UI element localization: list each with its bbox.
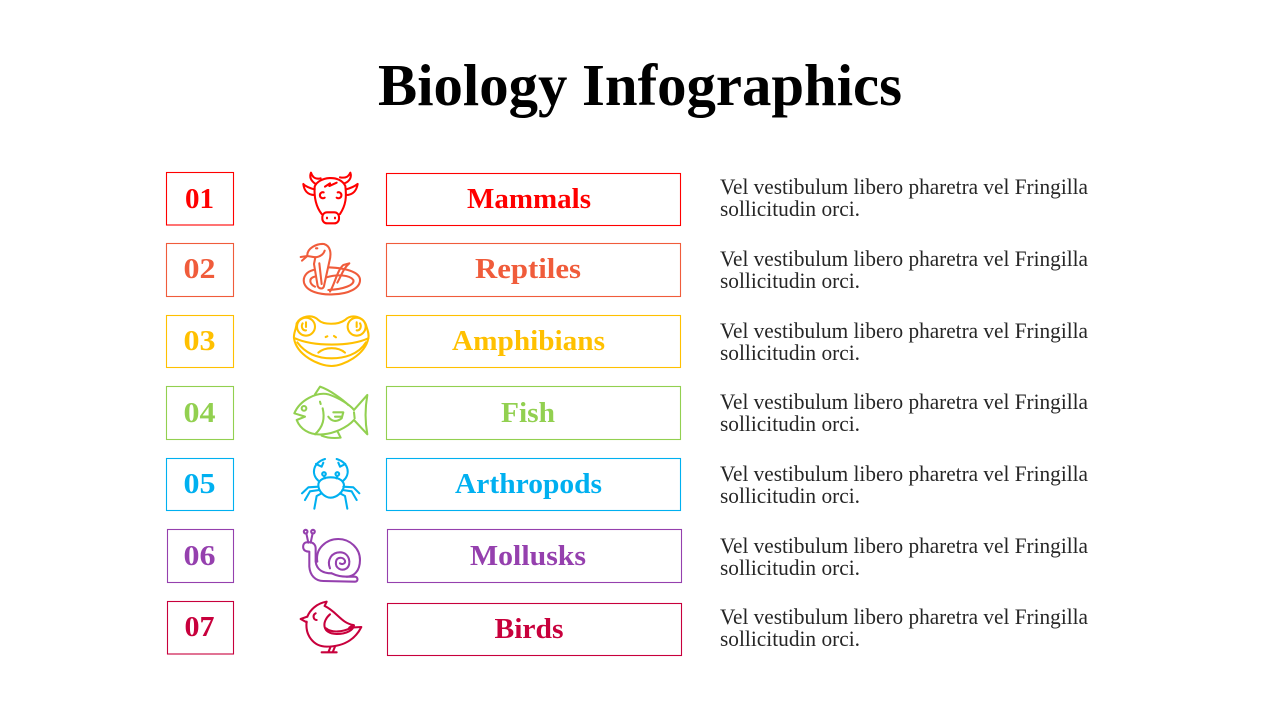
- row 2: reptiles: [166, 244, 1088, 296]
- description 7: Vel vestibulum libero pharetra vel Fringilla: [720, 604, 1088, 629]
- number box 05: 05: [184, 469, 216, 500]
- number box 06: [168, 530, 234, 582]
- number box 01: 01: [185, 184, 214, 215]
- number box 03: [166, 316, 234, 368]
- icon: frog: [294, 316, 369, 366]
- name box: Fish: Fish: [501, 398, 555, 429]
- description 7: sollicitudin orci.: [720, 626, 860, 651]
- name box: Reptiles: Reptiles: [475, 254, 581, 285]
- name box: Mollusks: [388, 530, 682, 582]
- row 7: birds: [168, 602, 1088, 656]
- number box 03: 03: [184, 326, 216, 357]
- number box 05: [166, 458, 234, 510]
- number box 07: 07: [184, 612, 214, 643]
- name box: Birds: Birds: [494, 614, 564, 645]
- number box 06: 06: [184, 541, 216, 572]
- description 3: sollicitudin orci.: [720, 340, 860, 365]
- description 3: Vel vestibulum libero pharetra vel Fringilla: [720, 318, 1088, 343]
- description 5: Vel vestibulum libero pharetra vel Fringilla: [720, 461, 1088, 486]
- name box: Arthropods: Arthropods: [455, 469, 602, 500]
- row 6: mollusks: [168, 530, 1088, 582]
- row 5: arthropods: [166, 458, 1088, 510]
- row 3: amphibians: [166, 316, 1088, 368]
- description 1: sollicitudin orci.: [720, 196, 860, 221]
- name box: Amphibians: [386, 316, 680, 368]
- icon: snail: [303, 530, 360, 582]
- name box: Fish: [386, 386, 680, 440]
- row 4: fish: [166, 386, 1088, 440]
- row 1: mammals: [166, 172, 1088, 226]
- description 4: sollicitudin orci.: [720, 411, 860, 436]
- description 6: Vel vestibulum libero pharetra vel Fringilla: [720, 533, 1088, 558]
- description 2: Vel vestibulum libero pharetra vel Fringilla: [720, 246, 1088, 271]
- title: Biology Infographics: [378, 52, 902, 118]
- number box 04: 04: [184, 398, 216, 429]
- name box: Mammals: [386, 174, 680, 226]
- icon: cow: [303, 173, 358, 223]
- name box: Arthropods: [386, 458, 680, 510]
- number box 01: [166, 172, 234, 225]
- icon: crab: [302, 459, 359, 509]
- name box: Reptiles: [386, 244, 680, 296]
- icon: bird: [301, 602, 361, 652]
- number box 02: [166, 244, 234, 296]
- description 4: Vel vestibulum libero pharetra vel Fringilla: [720, 389, 1088, 414]
- name box: Mollusks: Mollusks: [470, 541, 586, 572]
- name box: Birds: [388, 604, 682, 656]
- description 1: Vel vestibulum libero pharetra vel Fringilla: [720, 174, 1088, 199]
- description 5: sollicitudin orci.: [720, 483, 860, 508]
- icon: fish: [294, 387, 367, 438]
- name box: Mammals: Mammals: [467, 184, 591, 215]
- description 2: sollicitudin orci.: [720, 268, 860, 293]
- number box 07: [168, 602, 234, 654]
- name box: Amphibians: Amphibians: [452, 326, 605, 357]
- icon: snake: [301, 244, 360, 294]
- number box 02: 02: [184, 254, 216, 285]
- number box 04: [166, 386, 234, 440]
- description 6: sollicitudin orci.: [720, 555, 860, 580]
